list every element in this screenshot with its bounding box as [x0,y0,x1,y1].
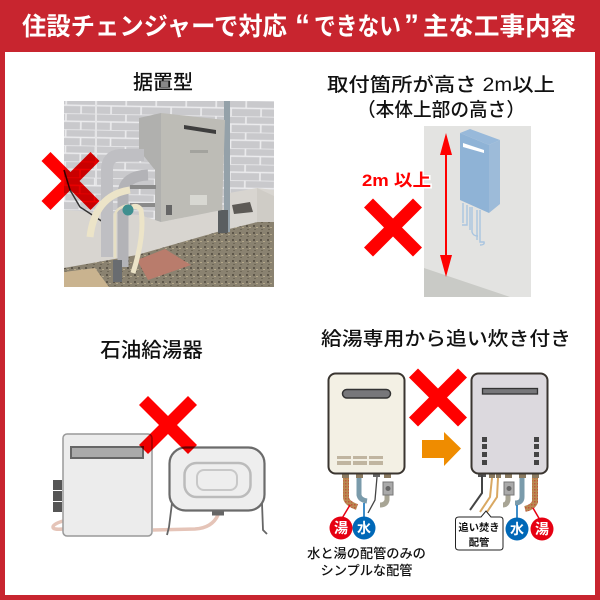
heading: floor-standing: 据置型 [133,71,193,94]
red cross [139,396,197,454]
label: water: 水 [510,521,524,537]
heading: reheating conversion: 給湯専用から追い炊き付き [321,328,571,350]
label: water [352,503,376,540]
label: hot water: 湯 [535,521,549,537]
heading: height condition: 取付箇所が高さ 2m以上 [327,74,555,96]
illustration: wall mounted unit [460,129,500,245]
callout: reheating piping: 追い焚き [458,521,500,534]
title [22,9,576,42]
callout: reheating piping: 配管 [469,536,489,549]
illustration: reheating unit [470,374,548,512]
wall illustration [424,126,531,297]
callout: reheating piping [456,511,503,550]
label: water: 水 [357,520,371,536]
illustration: oil heater and tank [53,434,267,536]
label: hot water: 湯 [334,520,348,536]
label: hot water [530,508,554,540]
title: 住設チェンジャーで対応 [22,13,287,41]
panel: floor-standing type [42,71,274,287]
illustration: hot-water-only unit [328,374,404,513]
caption: simple piping: シンプルな配管 [321,562,412,578]
panel: oil water heater [53,339,267,536]
title: できない [314,13,401,41]
arrow: height dimension [440,133,452,277]
title: “ [295,9,310,42]
title: ” [404,9,419,42]
label: water [506,505,528,540]
red cross [364,198,422,256]
label: 2m or more: 2m 以上 [362,171,431,190]
panel: hot water only to reheating [307,328,571,578]
red cross [42,152,100,210]
red cross [409,368,467,426]
caption: simple piping [307,545,426,578]
title: 主な工事内容 [423,13,576,41]
panel: installation height over 2m [327,74,555,297]
caption: simple piping: 水と湯の配管のみの [307,545,426,561]
photo: floor-standing water heater [64,101,274,287]
arrow: orange [422,432,461,466]
subheading: height of unit top: （本体上部の高さ） [357,99,525,121]
heading: oil heater: 石油給湯器 [100,339,203,362]
label: hot water [330,505,352,540]
